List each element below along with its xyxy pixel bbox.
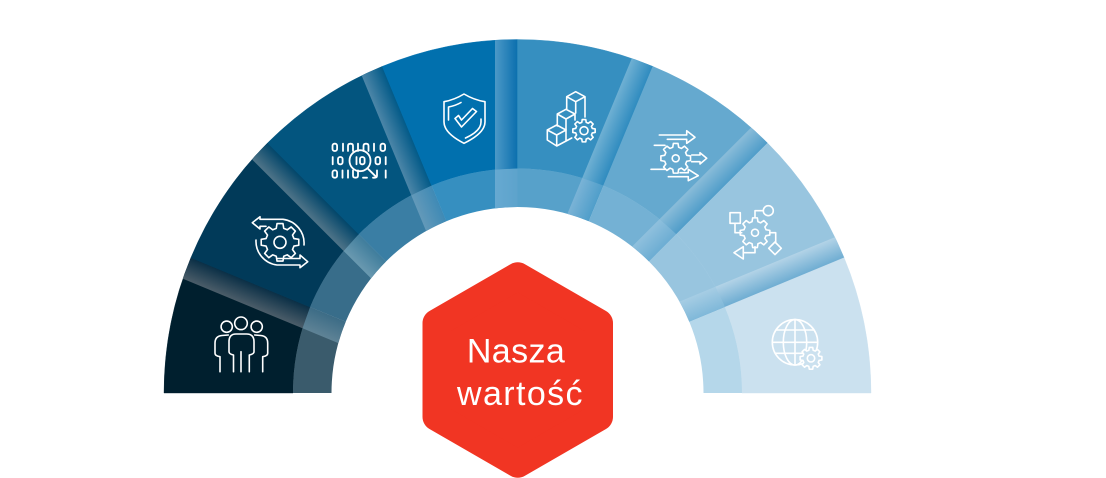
hexagon label: Nasza [467,333,565,371]
panel: segment 1 people [164,258,347,393]
center hexagon: Nasza wartość [436,276,599,464]
panel: segment 2 process cycle [191,143,387,322]
icon: globe with gear [772,320,822,369]
icon: binary data with magnifier [332,144,386,178]
hexagon shape [436,276,599,464]
icon: people [215,317,268,372]
icon: cubes and gear [547,92,595,146]
semicircle diagram [164,39,871,393]
icon: shield with check [444,94,485,143]
icon: process flow with gear [730,206,781,259]
panel: segment 8 global [689,258,871,393]
icon: gear with speed arrows [651,131,707,181]
panel: segment 6 automation [589,66,768,262]
icon: gear with cycle arrows [252,217,308,268]
panel: segment 7 workflow [649,143,844,322]
panel: segment 4 security [382,39,518,221]
hexagon label: wartość [456,375,584,413]
panel: segment 5 building blocks [518,39,653,222]
panel: segment 3 data [268,66,447,262]
